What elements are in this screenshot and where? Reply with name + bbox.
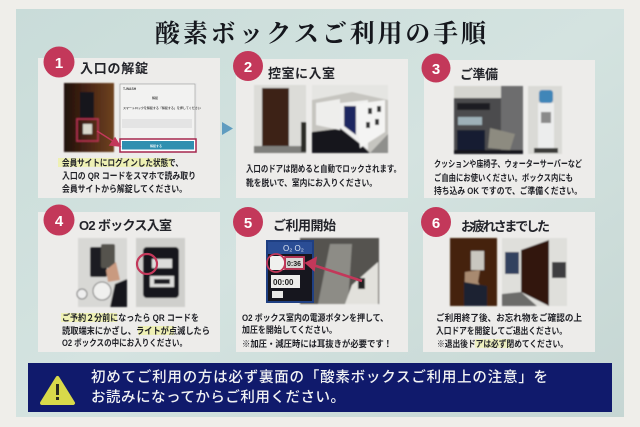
notice text: 初めてご利用の方は必ず裏面の「酸素ボックスご利用上の注意」を bbox=[91, 368, 548, 386]
step 4 text: O2 ボックスの中にお入りください。 bbox=[62, 337, 187, 348]
step 4 badge bbox=[44, 204, 74, 236]
arrow: step 1 to step 2 bbox=[222, 122, 233, 135]
step 2 photo: door bbox=[254, 85, 306, 153]
step 1 photo: door with QR reader bbox=[64, 83, 114, 152]
step 1 highlight bbox=[58, 158, 172, 167]
notice text: お読みになってからご利用ください。 bbox=[91, 388, 345, 406]
panel: step 5 bbox=[233, 207, 408, 352]
step 4 reader highlight ring bbox=[137, 254, 157, 274]
step 3 photo: water server bbox=[528, 86, 562, 154]
step 5 text: ※加圧・減圧時には耳抜きが必要です！ bbox=[242, 338, 392, 349]
step 6 text: ご利用終了後、お忘れ物をご確認の上 bbox=[436, 312, 582, 323]
step 1 screenshot: member site: T-WASH bbox=[123, 87, 137, 91]
step 2 badge: 2 bbox=[244, 59, 252, 76]
step 1 screenshot: member site: スマートロックを解錠する「解錠する」を押してください bbox=[123, 105, 201, 110]
title: 酸素ボックスご利用の手順 bbox=[155, 20, 488, 48]
step 1 screenshot: member site bbox=[118, 83, 201, 153]
step 5 text: O2 ボックス室内の電源ボタンを押して、 bbox=[242, 312, 388, 323]
step 6 text: 入口ドアを開錠してご退出ください。 bbox=[436, 325, 567, 336]
step 3 badge bbox=[422, 54, 450, 82]
step 1 heading: 入口の解錠 bbox=[80, 61, 148, 76]
step 6 photo: closed door bbox=[502, 238, 567, 306]
step 4 photo: reader close-up bbox=[136, 238, 185, 307]
step 5 panel: control display: 00:00 bbox=[273, 278, 294, 287]
panel: step 4 bbox=[38, 204, 220, 352]
step 4 photo: phone at reader bbox=[77, 238, 127, 307]
step 1 badge: 1 bbox=[55, 55, 63, 72]
notice banner bbox=[28, 363, 612, 412]
panel: step 1 bbox=[38, 46, 220, 198]
step 3 photo: shelf and cushions bbox=[454, 86, 523, 154]
step 3 text: ご自由にお使いください。ボックス内にも bbox=[434, 172, 573, 183]
step 4 text: ご予約２分前になったら QR コードを bbox=[62, 312, 199, 323]
step 3 heading: ご準備 bbox=[460, 67, 498, 82]
step 5 heading: ご利用開始 bbox=[273, 218, 336, 233]
step 3 text: クッションや座椅子、ウォーターサーバーなど bbox=[434, 158, 583, 169]
step 1 text: 会員サイトから解錠してください。 bbox=[62, 183, 187, 194]
step 4 text: 読取端末にかざし、ライトが点滅したら bbox=[62, 325, 210, 336]
step 4 highlights bbox=[61, 313, 174, 335]
step 4 heading: O2 ボックス入室 bbox=[79, 218, 172, 233]
step 2 text bbox=[246, 163, 401, 188]
step 1 badge bbox=[44, 46, 74, 78]
step 1 arrow: QR to button bbox=[97, 131, 120, 146]
notice text bbox=[91, 368, 548, 406]
step 5 badge: 5 bbox=[244, 215, 252, 232]
step 2 heading: 控室に入室 bbox=[268, 66, 335, 81]
step 2 text: 靴を脱いで、室内にお入りください。 bbox=[246, 177, 377, 188]
step 6 badge: 6 bbox=[432, 215, 440, 232]
step 1 text bbox=[62, 157, 196, 194]
step 4 text bbox=[62, 312, 210, 348]
step 5 panel: control display: O₂ O₂ bbox=[283, 244, 304, 253]
icon: warning triangle bbox=[42, 378, 73, 403]
step 2 text: 入口のドアは閉めると自動でロックされます。 bbox=[246, 163, 401, 174]
step 2 badge bbox=[233, 51, 263, 81]
step 5 panel: control display bbox=[266, 240, 314, 303]
step 5 highlight ring and arrow bbox=[267, 254, 362, 281]
step 6 text: ※退出後ドアは必ず閉めてください。 bbox=[437, 338, 568, 349]
step 6 highlight bbox=[475, 339, 510, 348]
step 3 text bbox=[434, 158, 583, 196]
step 5 text bbox=[242, 312, 392, 349]
panel: step 3 bbox=[422, 54, 595, 198]
step 6 photo: unlocking door bbox=[450, 238, 497, 306]
step 6 badge bbox=[421, 207, 451, 237]
step 1 text: 会員サイトにログインした状態で、 bbox=[62, 157, 183, 168]
step 6 text bbox=[436, 312, 582, 349]
step 1 screenshot: member site: 解錠する bbox=[150, 143, 162, 148]
step 5 badge bbox=[233, 207, 263, 237]
step 2 photo: oxygen box room bbox=[312, 85, 388, 153]
step 5 text: 加圧を開始してください。 bbox=[242, 324, 337, 335]
step 3 text: 持ち込み OK ですので、ご準備ください。 bbox=[434, 185, 582, 196]
step 5 photo: box interior bbox=[300, 238, 379, 304]
step 4 badge: 4 bbox=[55, 213, 64, 230]
panel: step 6 bbox=[421, 207, 595, 352]
step 1 screenshot: member site: 解錠 bbox=[152, 95, 158, 100]
step 1 text: 入口の QR コードをスマホで読み取り bbox=[62, 170, 196, 181]
step 6 heading: お疲れさまでした bbox=[461, 219, 550, 234]
step 3 badge: 3 bbox=[432, 61, 440, 78]
panel: step 2 bbox=[233, 51, 408, 198]
step 5 panel: control display: 0:36 bbox=[287, 261, 301, 268]
